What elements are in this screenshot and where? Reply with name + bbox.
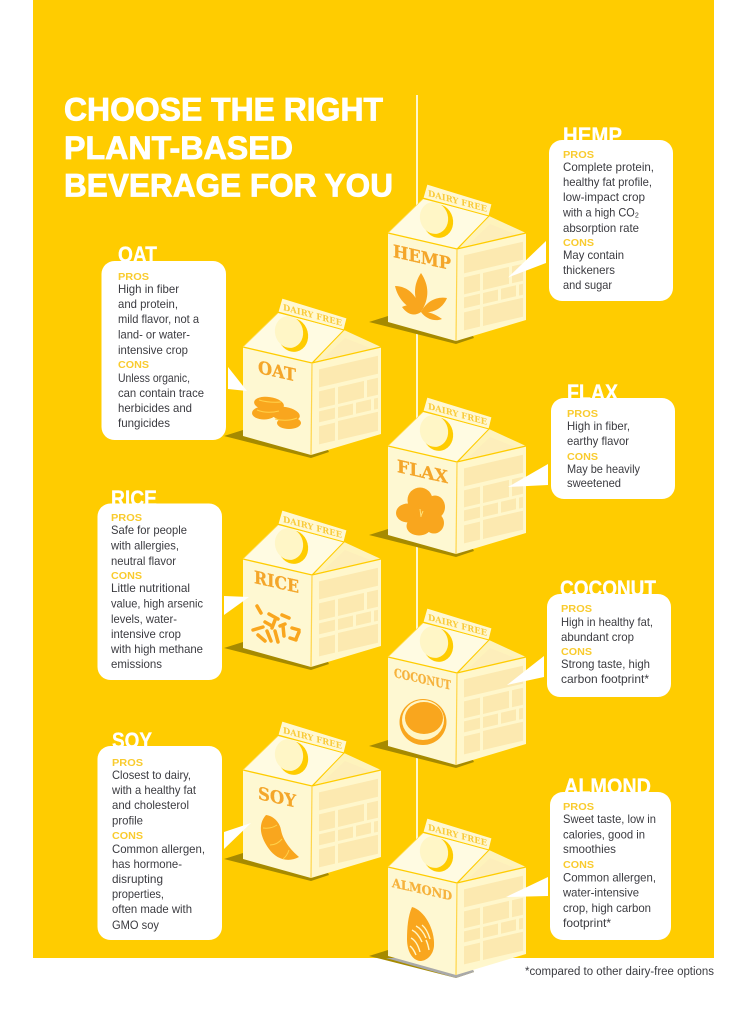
bubble: soy	[98, 746, 222, 940]
carton: oat: DAIRY FREE	[283, 303, 342, 329]
text: rice: value, high arsenic	[111, 596, 203, 610]
text: soy: CONS	[112, 830, 143, 842]
text: oat: mild flavor, not a	[118, 312, 199, 326]
panel: soy	[98, 728, 251, 940]
text: soy: disrupting	[112, 872, 163, 886]
text: oat: and protein,	[118, 297, 178, 311]
text: hemp: and sugar	[563, 278, 612, 292]
text: oat: CONS	[118, 359, 149, 371]
text: rice: CONS	[111, 570, 142, 582]
title: CHOOSE THE RIGHT	[64, 92, 383, 128]
carton: soy: SOY	[258, 783, 296, 813]
carton: almond: ALMOND	[391, 875, 452, 903]
panel: rice	[98, 486, 249, 680]
text: almond: Sweet taste, low in	[563, 812, 656, 826]
text: soy: Closest to dairy,	[112, 768, 191, 782]
bubble: almond	[550, 792, 671, 940]
text: coconut: PROS	[561, 603, 592, 615]
text: oat: PROS	[118, 271, 149, 283]
text: rice: with high methane	[110, 642, 203, 656]
text: oat: land- or water-	[118, 328, 190, 342]
text: oat: can contain trace	[118, 386, 204, 400]
text: oat: herbicides and	[118, 401, 192, 415]
icon: rice grains	[253, 606, 299, 642]
footnote: *compared to other dairy-free options	[525, 966, 714, 978]
callout tail: hemp	[508, 241, 546, 278]
icon: flax flower	[396, 488, 445, 536]
bubble: rice	[98, 504, 222, 680]
panel: hemp	[508, 123, 673, 301]
text: coconut: Strong taste, high	[561, 657, 650, 671]
text: hemp: absorption rate	[563, 221, 639, 235]
text: soy: and cholesterol	[112, 798, 189, 812]
carton: flax: DAIRY FREE	[428, 402, 487, 428]
text: oat: High in fiber	[118, 282, 179, 296]
text: flax: PROS	[567, 408, 598, 420]
carton: flax	[369, 397, 526, 557]
carton: flax: FLAX	[397, 456, 448, 488]
callout tail: rice	[224, 596, 249, 615]
panel: almond	[506, 774, 671, 940]
text: soy: has hormone-	[112, 857, 182, 871]
text: almond	[562, 801, 656, 930]
text: almond: Common allergen,	[563, 870, 656, 884]
text: almond: footprint*	[563, 916, 611, 930]
callout tail: soy	[224, 823, 251, 849]
panel: coconut	[507, 576, 671, 697]
heading: coconut: COCONUT	[560, 576, 656, 601]
carton: hemp: DAIRY FREE	[428, 189, 487, 215]
text: soy: properties,	[112, 887, 164, 901]
text: coconut	[561, 603, 653, 686]
text: soy: with a healthy fat	[111, 783, 197, 797]
text: flax: earthy flavor	[567, 434, 629, 448]
carton: almond: DAIRY FREE	[428, 823, 487, 849]
text: soy: Common allergen,	[112, 842, 205, 856]
bubble: hemp	[549, 140, 673, 301]
panel: oat	[102, 242, 247, 440]
text: hemp: May contain	[563, 248, 624, 262]
text: almond: PROS	[563, 801, 594, 813]
text: oat: Unless organic,	[118, 371, 190, 385]
title	[64, 92, 393, 204]
carton: soy	[224, 721, 381, 881]
carton: hemp: HEMP	[393, 241, 451, 275]
text: soy: PROS	[112, 757, 143, 769]
carton: coconut: DAIRY FREE	[428, 613, 487, 639]
bubble: coconut	[547, 594, 671, 697]
text: almond: water-intensive	[562, 886, 639, 900]
text: coconut: High in healthy fat,	[561, 615, 653, 629]
text: hemp: CONS	[563, 237, 594, 249]
text: rice	[110, 512, 203, 671]
center vertical line	[416, 95, 418, 958]
text: oat	[118, 271, 204, 430]
text: rice: Little nutritional	[111, 581, 190, 595]
callout tail: flax	[508, 464, 548, 487]
icon: coconut	[400, 699, 446, 745]
text: rice: levels, water-	[111, 612, 177, 626]
icon: hemp leaf	[395, 273, 447, 320]
heading: soy: SOY	[112, 728, 152, 753]
carton: oat: OAT	[258, 357, 296, 386]
callout tail: oat	[228, 367, 247, 391]
carton: oat	[224, 298, 381, 458]
text: coconut: CONS	[561, 646, 592, 658]
text: soy: often made with	[112, 902, 192, 916]
text: almond: CONS	[563, 859, 594, 871]
text: hemp: PROS	[563, 149, 594, 161]
text: almond: crop, high carbon	[563, 901, 651, 915]
text: oat: fungicides	[118, 416, 170, 430]
text: soy: GMO soy	[112, 918, 159, 932]
text: hemp	[562, 149, 654, 292]
bubble: flax	[551, 398, 675, 499]
text: flax: sweetened	[567, 476, 621, 490]
text: coconut: carbon footprint*	[561, 672, 649, 686]
heading: hemp: HEMP	[563, 123, 622, 148]
text: hemp: thickeners	[563, 263, 615, 277]
text: rice: emissions	[111, 657, 162, 671]
icon: almond	[407, 907, 434, 961]
heading: rice: RICE	[111, 486, 157, 511]
carton: almond	[369, 818, 526, 978]
bubble: oat	[102, 261, 226, 440]
icon: oat flakes	[252, 395, 301, 429]
heading: almond: ALMOND	[564, 774, 651, 799]
title: BEVERAGE FOR YOU	[64, 168, 393, 204]
carton: coconut: COCONUT	[394, 665, 451, 693]
text: rice: Safe for people	[111, 523, 187, 537]
text: hemp: with a high CO₂	[562, 206, 639, 220]
carton: rice	[224, 510, 381, 670]
text: hemp: low-impact crop	[563, 190, 645, 204]
text: rice: PROS	[111, 512, 142, 524]
text: flax: High in fiber,	[567, 419, 630, 433]
text: hemp: Complete protein,	[563, 160, 654, 174]
text: almond: smoothies	[563, 842, 616, 856]
callout tail: almond	[506, 877, 548, 897]
heading: oat: OAT	[118, 242, 157, 267]
text: rice: with allergies,	[110, 538, 179, 552]
heading: flax: FLAX	[567, 380, 618, 405]
carton: coconut	[369, 608, 526, 768]
text: flax: May be heavily	[567, 462, 640, 476]
carton: hemp	[369, 184, 526, 344]
text: almond: calories, good in	[563, 828, 645, 842]
panel: flax	[508, 380, 675, 499]
text: soy	[111, 757, 205, 932]
text: rice: neutral flavor	[111, 554, 176, 568]
text: coconut: abundant crop	[561, 630, 634, 644]
carton: soy: DAIRY FREE	[283, 726, 342, 752]
text: soy: profile	[112, 814, 143, 828]
text: oat: intensive crop	[118, 343, 188, 357]
text: hemp: healthy fat profile,	[563, 175, 652, 189]
text: flax: CONS	[567, 451, 598, 463]
carton: rice: RICE	[254, 567, 299, 598]
text: flax	[567, 408, 640, 490]
text: rice: intensive crop	[111, 627, 181, 641]
title: PLANT-BASED	[64, 130, 293, 166]
callout tail: coconut	[507, 656, 544, 685]
carton: rice: DAIRY FREE	[283, 515, 342, 541]
icon: soybean pod	[261, 815, 299, 860]
